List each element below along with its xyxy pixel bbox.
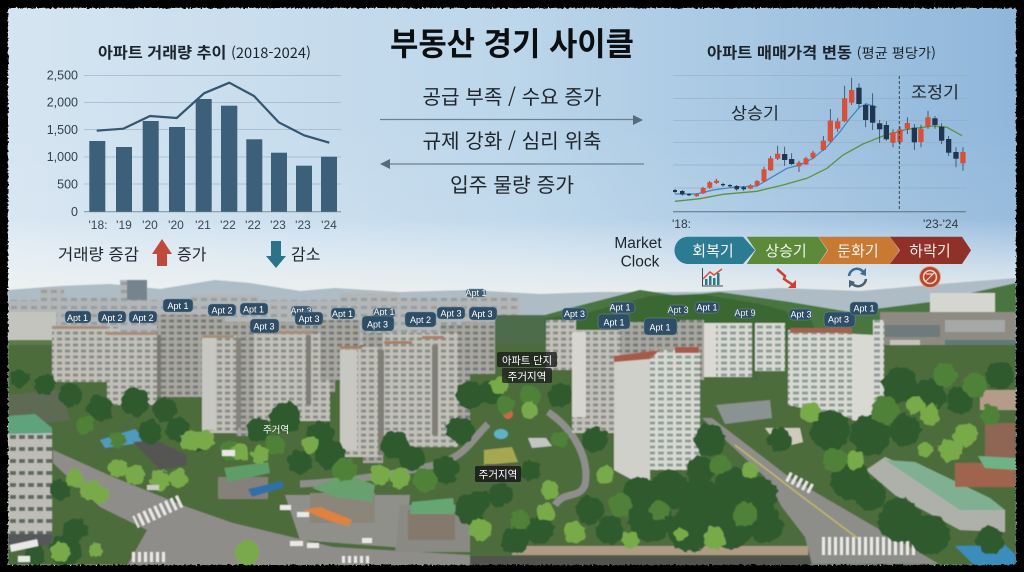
x axis labels: '18: <box>89 218 107 232</box>
icon: red seal <box>920 266 940 288</box>
legend: volume change <box>58 239 320 268</box>
grid lines <box>673 75 967 188</box>
shop: green roof three <box>408 510 455 540</box>
chart heading: 아파트 거래량 추이 (2018-2024) <box>98 41 311 63</box>
right green hills <box>520 283 1016 345</box>
market clock label: Clock <box>621 254 660 270</box>
place tag: small residential: 주거역 <box>263 422 289 436</box>
apartment labels <box>65 288 878 335</box>
label group: small tags: Apt 3 <box>564 309 585 319</box>
market clock label: Market <box>614 235 662 252</box>
low building near park <box>716 400 772 424</box>
chart heading: 아파트 매매가격 변동 (평균 평당가) <box>707 41 936 63</box>
y axis and grid lines: 0 <box>71 205 78 219</box>
shop: green roof two <box>310 493 375 523</box>
chevron: decline: 하락기 <box>909 240 951 261</box>
sidewalk <box>512 546 808 555</box>
x axis labels: '22 <box>245 218 261 232</box>
x axis label start: '18: <box>672 217 691 231</box>
x axis label end: '23-'24 <box>923 217 959 231</box>
label group: small tags: Apt 2 <box>410 315 431 325</box>
x axis labels: '22 <box>220 218 236 232</box>
road: right avenue <box>702 418 939 564</box>
label: correction phase: 조정기 <box>911 79 959 103</box>
cars and pedestrians <box>10 450 372 562</box>
candlesticks <box>673 78 966 197</box>
label group: small tags: Apt 3 <box>253 322 275 332</box>
icon: red up arrow <box>152 239 172 266</box>
divider: correction start <box>898 76 900 211</box>
roofs <box>52 326 107 329</box>
y axis and grid lines <box>47 68 341 219</box>
legend: volume change: 감소 <box>291 241 320 265</box>
x axis labels: '21 <box>195 218 211 232</box>
x axis labels: '23 <box>295 218 311 232</box>
foreground left building <box>8 414 52 546</box>
small buildings <box>100 390 1016 566</box>
tower side walls <box>340 350 357 450</box>
label group: back row: Apt 1 <box>465 288 487 298</box>
apartment buildings <box>52 315 884 484</box>
shop: green roof one <box>218 477 268 499</box>
label group: small tags: Apt 1 <box>603 318 625 328</box>
label group: small tags: Apt 1 <box>167 301 189 311</box>
blue roof pavilion <box>100 429 146 448</box>
label group: back row: Apt 3 <box>667 305 689 315</box>
icon: cycle arrows <box>849 268 866 288</box>
y axis and grid lines: 500 <box>57 178 78 192</box>
icon: falling arrow <box>777 269 796 288</box>
x axis labels: '19 <box>116 218 132 232</box>
large white block <box>873 320 884 410</box>
chevron: recovery: 회복기 <box>692 240 734 261</box>
scene: apartment district photo <box>8 278 1016 567</box>
label: rising phase: 상승기 <box>731 100 779 124</box>
road: curved estate road <box>300 412 586 505</box>
y axis and grid lines: 1,500 <box>47 123 78 137</box>
crosswalks <box>130 472 917 563</box>
place tag: residential area top: 주거지역 <box>508 369 546 384</box>
parking lot <box>285 495 410 548</box>
icon: teal down arrow <box>266 241 286 268</box>
label group: small tags: Apt 1 <box>853 304 875 314</box>
x axis labels: '23 <box>270 218 286 232</box>
cycle text: move-in: 입주 물량 증가 <box>450 169 574 198</box>
label group: small tags: Apt 2 <box>211 306 233 316</box>
label group: small tags: Apt 1 <box>609 302 631 312</box>
label group: back row <box>290 288 756 318</box>
x axis labels: '24 <box>321 218 337 232</box>
label group: small tags: Apt 3 <box>367 320 388 330</box>
label group: small tags: Apt 1 <box>332 309 353 319</box>
label group: small tags: Apt 1 <box>696 302 718 312</box>
legend: volume change: 거래량 증감 <box>58 241 139 265</box>
panel: cycle arrows <box>380 81 644 198</box>
arrow: right <box>380 115 643 125</box>
panel: apartment price chart <box>672 41 967 231</box>
legend: volume change: 증가 <box>177 241 207 265</box>
label group: small tags <box>65 299 878 335</box>
place tag: residential area bottom: 주거지역 <box>479 467 517 482</box>
label group: small tags: Apt 1 <box>67 313 88 323</box>
front right tower <box>650 350 700 470</box>
recess shadows <box>157 335 161 397</box>
icons under market clock <box>702 266 940 288</box>
chevron: rise: 상승기 <box>765 240 807 261</box>
right low-rise <box>866 457 1005 532</box>
label group: small tags: Apt 1 <box>649 322 671 332</box>
blue awning <box>248 481 284 497</box>
label group: small tags: Apt 3 <box>440 308 462 318</box>
title: 부동산 경기 사이클 <box>390 19 634 65</box>
x axis labels: '20 <box>168 218 184 232</box>
ground <box>8 345 1016 565</box>
trees <box>11 361 1014 567</box>
label group: small tags: Apt 2 <box>132 313 154 323</box>
y axis and grid lines: 1,000 <box>47 150 78 164</box>
x axis labels <box>89 218 337 232</box>
label group: small tags: Apt 3 <box>298 314 320 324</box>
arrow: left <box>380 159 644 169</box>
cycle text: regulation: 규제 강화 / 심리 위축 <box>422 125 602 154</box>
label group: back row: Apt 3 <box>290 306 312 316</box>
moving average lines <box>675 104 962 201</box>
bar chart <box>89 99 337 212</box>
icon: growth chart <box>702 268 723 286</box>
chevron: decline <box>890 237 971 264</box>
label group: small tags: Apt 2 <box>101 313 123 323</box>
trend line <box>97 83 329 143</box>
blue roof corner <box>955 545 1016 566</box>
label group: back row: Apt 9 <box>734 308 756 318</box>
chevron: rise <box>747 237 827 264</box>
x axis labels: '20 <box>142 218 158 232</box>
estate garden <box>484 409 552 470</box>
panel: market clock <box>614 235 971 270</box>
label group: back row: Apt 1 <box>373 307 395 317</box>
label group: small tags: Apt 3 <box>790 310 812 320</box>
y axis and grid lines: 2,500 <box>47 68 78 82</box>
back row <box>52 327 120 382</box>
orange awning <box>303 507 352 526</box>
chevron: slowdown: 둔화기 <box>837 240 879 261</box>
chevron: slowdown <box>818 237 899 264</box>
label group: small tags: Apt 3 <box>828 314 849 324</box>
distant mountains <box>8 278 1016 330</box>
dark rooftop <box>133 440 187 470</box>
label group: small tags: Apt 3 <box>471 309 493 319</box>
y axis and grid lines: 2,000 <box>47 96 78 110</box>
panel: transaction volume chart <box>47 41 341 268</box>
place tag: apartment complex: 아파트 단지 <box>502 353 552 368</box>
label group: small tags: Apt 1 <box>243 304 264 314</box>
cycle text: supply: 공급 부족 / 수요 증가 <box>422 81 602 110</box>
far skyline <box>8 280 1016 405</box>
road: left intersection <box>53 450 470 566</box>
chevron: recovery <box>674 237 755 264</box>
